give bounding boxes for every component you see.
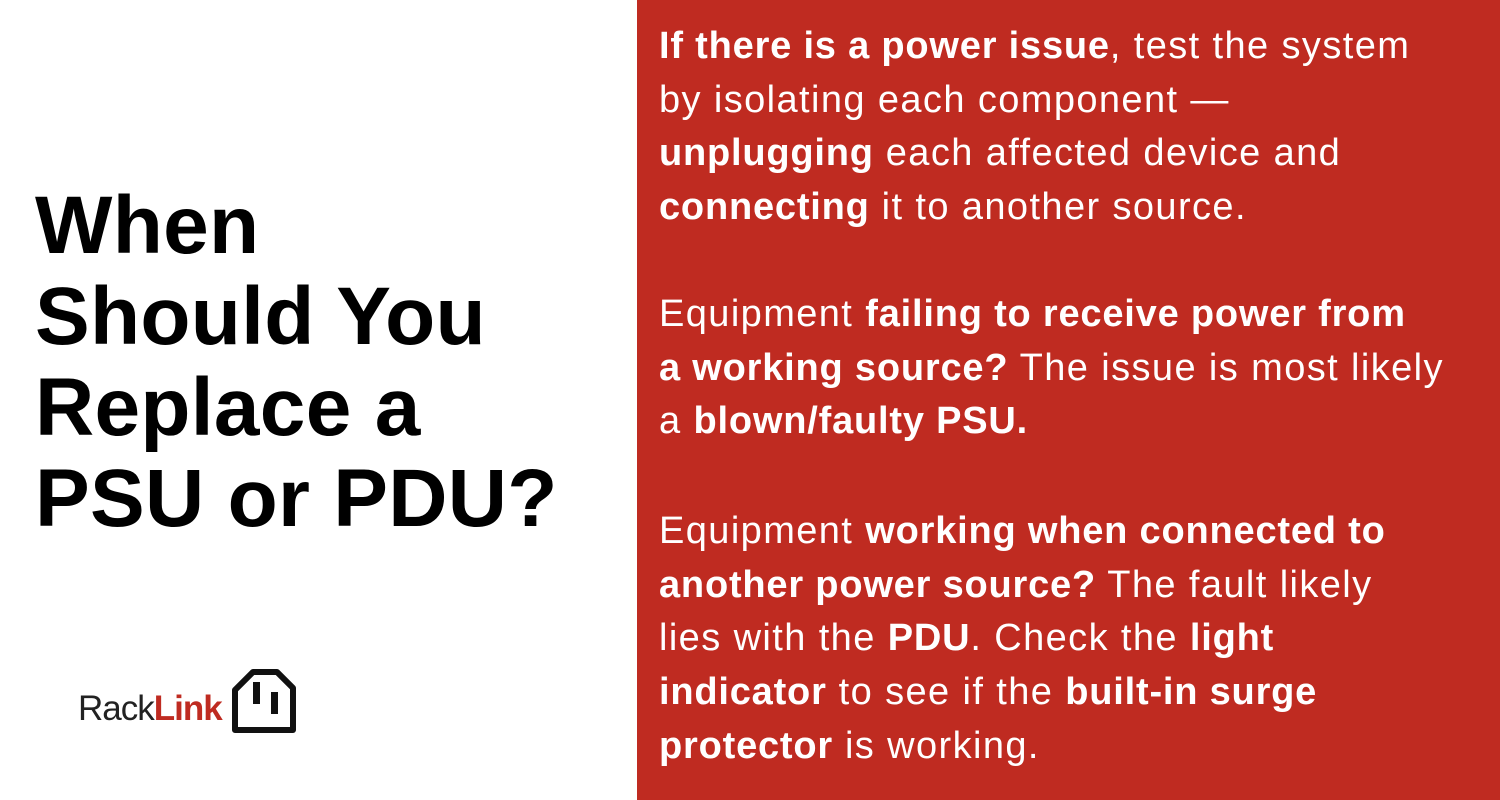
icon: plug outlet: [232, 669, 296, 733]
text block: faulty PSU: a blown/faulty PSU.: [659, 400, 1028, 442]
text block: isolate test: by isolating each component —: [659, 79, 1230, 121]
title: When: [35, 180, 259, 271]
text block: PDU fault: another power source? The fault likely: [659, 564, 1373, 606]
title: Replace a: [35, 362, 421, 453]
text block: isolate test: If there is a power issue, test the system: [659, 25, 1410, 67]
text block: PDU fault: protector is working.: [659, 725, 1040, 767]
text block: PDU fault: indicator to see if the built-in surge: [659, 671, 1317, 713]
logo: RackLink: RackLink: [78, 689, 222, 728]
panel: explanation: [637, 0, 1500, 800]
text block: PDU fault: [659, 510, 1386, 767]
text block: faulty PSU: [659, 293, 1444, 442]
title: [35, 180, 558, 544]
title: Should You: [35, 271, 486, 362]
title: PSU or PDU?: [35, 453, 558, 544]
text block: faulty PSU: a working source? The issue is most likely: [659, 347, 1444, 389]
text block: faulty PSU: Equipment failing to receive power from: [659, 293, 1406, 335]
text block: isolate test: [659, 25, 1410, 228]
text block: PDU fault: Equipment working when connected to: [659, 510, 1386, 552]
text block: isolate test: connecting it to another source.: [659, 186, 1247, 228]
text block: isolate test: unplugging each affected device and: [659, 132, 1341, 174]
text block: PDU fault: lies with the PDU. Check the light: [659, 617, 1274, 659]
logo: RackLink: [78, 669, 296, 733]
